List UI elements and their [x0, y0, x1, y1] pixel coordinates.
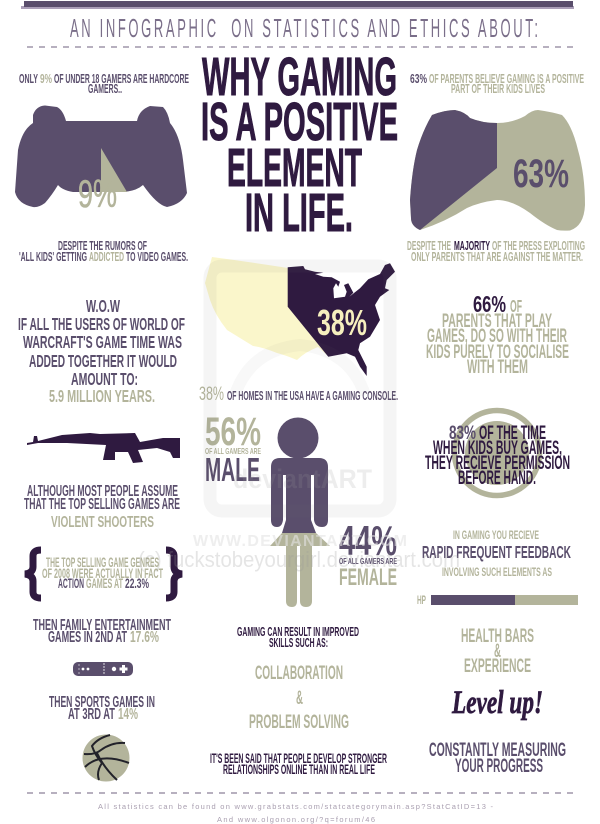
top bar	[21, 1, 574, 9]
text: top selling genres	[42, 554, 163, 591]
text: rumours of addiction: TO VIDEO GAMES.	[126, 249, 188, 264]
text: 9% hardcore gamers: GAMERS..	[88, 81, 122, 96]
text: 56% male: OF ALL GAMERS ARE	[205, 446, 261, 456]
text: improved skills heading	[237, 624, 359, 650]
watermark: WWW.DEVIANTART.COM	[193, 533, 407, 550]
text: collaboration and problem solving: COLLABORATION	[255, 663, 343, 684]
text: 66% of parents	[426, 291, 569, 378]
text: rumours of addiction	[19, 238, 188, 264]
text: 9% hardcore gamers	[19, 71, 189, 96]
text: World of Warcraft fact: IF ALL THE USERS OF WORLD OF	[18, 314, 185, 334]
title: WHY GAMING	[202, 48, 397, 107]
text: health bars and experience: &	[494, 641, 501, 662]
text: 83% permission: 83%	[449, 423, 476, 444]
text: sports games: 14%	[118, 706, 138, 723]
bracket: left	[25, 550, 41, 598]
watermark	[138, 266, 460, 572]
text: majority of the press: DESPITE THE	[407, 238, 451, 253]
text: 38% of homes: 38%	[199, 384, 224, 405]
icon: person figure	[270, 418, 330, 607]
text: top selling genres: THE TOP SELLING GAME GENRES	[46, 554, 159, 570]
text: stronger relationships: RELATIONSHIPS ONLINE THAN IN REAL LIFE	[223, 761, 375, 777]
text: 9% hardcore gamers: 9%	[40, 71, 52, 86]
text: 56% male: MALE	[205, 451, 260, 488]
text: majority of the press: MAJORITY	[454, 238, 490, 253]
text: 9% hardcore gamers: ONLY	[19, 71, 38, 86]
title: IS A POSITIVE	[201, 93, 398, 152]
text: constantly measuring	[429, 740, 566, 777]
text: family entertainment: GAMES IN 2ND AT	[48, 629, 127, 646]
text: World of Warcraft fact: WARCRAFT'S GAME TIME WAS	[23, 332, 182, 352]
text: 44% female	[339, 517, 397, 591]
text: 56% male: 56%	[205, 410, 261, 454]
text: collaboration and problem solving	[249, 663, 349, 733]
text: 66% of parents: WITH THEM	[467, 357, 528, 378]
text: 66% of parents: 66%	[473, 291, 506, 317]
text: violent shooters: THAT THE TOP SELLING GAMES ARE	[24, 496, 180, 513]
icon: playstation controller with 9% slice: 9%	[78, 173, 117, 216]
text: 44% female: OF ALL GAMERS ARE	[339, 556, 397, 566]
text: stronger relationships	[210, 750, 387, 777]
text: 44% female: 44%	[339, 517, 397, 564]
text: top selling genres: OF 2008 WERE ACTUALLY IN FACT	[42, 565, 163, 581]
text: violent shooters: ALTHOUGH MOST PEOPLE ASSUME	[27, 483, 178, 500]
text: improved skills heading: SKILLS SUCH AS:	[269, 635, 328, 650]
text: 63% of parents: 63%	[410, 71, 427, 86]
text: collaboration and problem solving: &	[296, 688, 303, 709]
text: 83% permission	[425, 423, 570, 489]
icon: basketball	[82, 734, 130, 782]
text: 38% of homes: OF HOMES IN THE USA HAVE A GAMING CONSOLE.	[227, 388, 398, 403]
text: World of Warcraft fact	[18, 296, 185, 406]
icon: xbox controller with 63% fill: 63%	[513, 152, 569, 196]
map: USA 38%	[205, 257, 395, 376]
text: collaboration and problem solving: PROBLEM SOLVING	[249, 712, 349, 733]
text: World of Warcraft fact: 5.9 MILLION YEARS.	[49, 386, 155, 406]
text: IT'S BEEN SAID THAT PEOPLE DEVELOP STRONGER	[210, 750, 387, 766]
text: top selling genres: 22.3%	[125, 575, 149, 591]
text: World of Warcraft fact: W.O.W	[86, 296, 120, 316]
text: sports games: AT 3RD AT	[68, 706, 115, 723]
icon: wii remote	[73, 662, 133, 676]
text: rumours of addiction: ADDICTED	[89, 249, 124, 264]
text: health bars and experience: HEALTH BARS	[461, 626, 534, 647]
map: USA 38%: 38%	[317, 302, 367, 343]
icon: xbox controller with 63% fill	[410, 110, 585, 231]
text: 83% permission: BEFORE HAND.	[458, 468, 536, 489]
icon: ring behind 83%	[454, 410, 540, 496]
title	[201, 48, 398, 243]
watermark: deviantART	[233, 464, 372, 494]
text: violent shooters: VIOLENT SHOOTERS	[51, 514, 154, 531]
header line: AN INFOGRAPHIC ON STATISTICS AND ETHICS ABOUT:	[70, 14, 538, 43]
text: 83% permission: OF THE TIME	[479, 423, 546, 444]
icon: rifle	[27, 433, 180, 463]
text: family entertainment: 17.6%	[130, 629, 159, 646]
text: majority of the press	[407, 238, 585, 264]
text: 44% female: FEMALE	[339, 564, 397, 591]
footer sources: And www.olgonon.org/?q=forum/46	[217, 815, 375, 824]
text: 56% male	[205, 410, 261, 488]
text: sports games	[49, 694, 155, 723]
text: rapid frequent feedback: IN GAMING YOU RECIEVE	[453, 528, 539, 542]
watermark: (c) fuckstobeyourgirl.deviantart.com	[138, 547, 460, 572]
title: ELEMENT	[227, 139, 362, 198]
bracket: right	[166, 550, 182, 598]
text: World of Warcraft fact: ADDED TOGETHER IT WOULD	[29, 351, 177, 371]
footer sources: All statistics can be found on www.grabstats.com/statcategorymain.asp?StatCatID=13 -	[98, 802, 494, 811]
text: 66% of parents: OF	[510, 296, 522, 316]
text: 38% of homes	[199, 384, 398, 405]
text: health bars and experience	[461, 626, 534, 677]
text: level up: Level up!	[451, 685, 543, 721]
chart: HP bar	[417, 593, 578, 607]
text: rumours of addiction: DESPITE THE RUMORS OF	[58, 238, 147, 253]
title: IN LIFE.	[245, 184, 353, 243]
text: rapid frequent feedback	[422, 528, 571, 579]
text: 63% of parents	[410, 71, 584, 96]
text: top selling genres: GAMES AT	[86, 575, 123, 591]
text: rumours of addiction: 'ALL KIDS' GETTING	[19, 249, 87, 264]
text: family entertainment	[33, 617, 171, 646]
footer sources	[98, 802, 494, 824]
text: top selling genres: ACTION	[58, 575, 84, 591]
text: 9% hardcore gamers: OF UNDER 18 GAMERS ARE HARDCORE	[54, 71, 189, 86]
text: sports games: THEN SPORTS GAMES IN	[49, 694, 155, 711]
text: violent shooters	[24, 483, 180, 531]
text: World of Warcraft fact: AMOUNT TO:	[71, 369, 138, 389]
text: health bars and experience: EXPERIENCE	[464, 656, 531, 677]
icon: playstation controller with 9% slice	[15, 106, 187, 216]
chart: HP bar: HP	[417, 593, 426, 607]
text: family entertainment: THEN FAMILY ENTERTAINMENT	[33, 617, 171, 634]
text: improved skills heading: GAMING CAN RESULT IN IMPROVED	[237, 624, 359, 639]
